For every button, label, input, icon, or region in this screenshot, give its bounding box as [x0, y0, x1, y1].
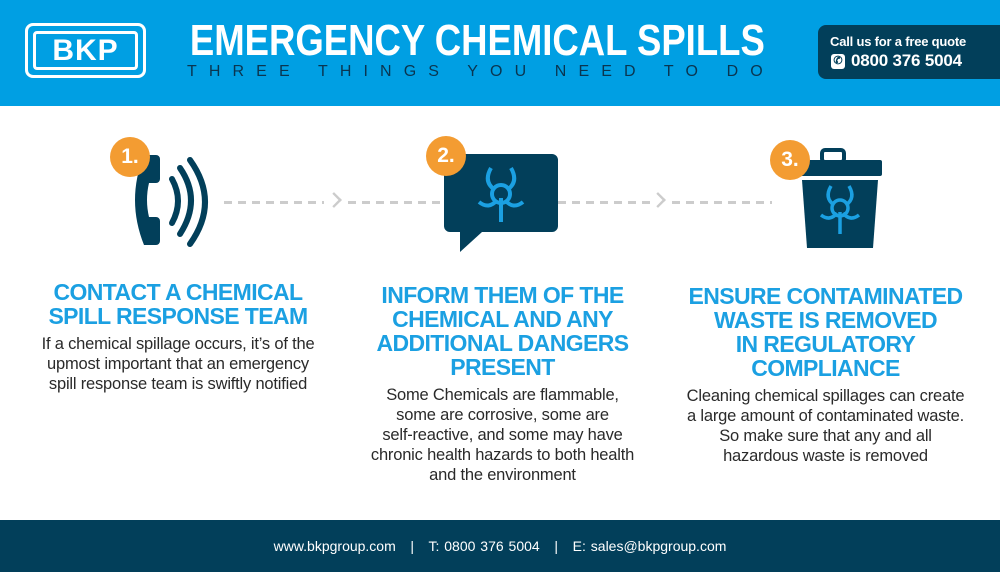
logo: BKP: [52, 34, 119, 67]
text 1: spill response team is swiftly notified: [49, 375, 307, 393]
text 1: upmost important that an emergency: [47, 355, 309, 373]
heading 1: [48, 279, 308, 329]
text 3: [687, 387, 964, 465]
text 2: [371, 386, 634, 484]
text 3: a large amount of contaminated waste.: [687, 407, 964, 425]
subtitle: THREE THINGS YOU NEED TO DO: [187, 63, 775, 80]
footer: www.bkpgroup.com | T: 0800 376 5004 | E: sales@bkpgroup.com: [274, 538, 726, 554]
column 1: [42, 279, 314, 393]
icon: speech bubble with biohazard: [444, 154, 558, 252]
logo: [25, 23, 146, 78]
call box: [818, 25, 1000, 79]
icon: bin: [802, 148, 882, 248]
badge 1: 1.: [121, 145, 139, 168]
icon: phone: ✆: [833, 55, 843, 67]
text 2: Some Chemicals are flammable,: [386, 386, 619, 404]
text 2: chronic health hazards to both health: [371, 446, 634, 464]
heading 2: INFORM THEM OF THE: [381, 282, 624, 308]
icon: phone step 1: [135, 155, 208, 247]
badge 1: [110, 137, 150, 177]
badge 3: [770, 140, 810, 180]
heading 2: CHEMICAL AND ANY: [392, 306, 613, 332]
heading 3: [689, 283, 962, 381]
text 3: hazardous waste is removed: [723, 447, 928, 465]
heading 3: COMPLIANCE: [751, 355, 900, 381]
heading 3: WASTE IS REMOVED: [714, 307, 937, 333]
text 1: If a chemical spillage occurs, it’s of the: [42, 335, 314, 353]
heading 3: ENSURE CONTAMINATED: [689, 283, 962, 309]
heading 2: [376, 282, 628, 380]
footer: [0, 520, 1000, 572]
text 2: and the environment: [429, 466, 576, 484]
text 2: self-reactive, and some may have: [382, 426, 623, 444]
title: EMERGENCY CHEMICAL SPILLS: [190, 16, 765, 65]
text 3: So make sure that any and all: [719, 427, 932, 445]
connectors: [224, 201, 324, 204]
heading 2: PRESENT: [450, 354, 555, 380]
call box: Call us for a free quote: [830, 34, 966, 49]
heading 1: CONTACT A CHEMICAL: [54, 279, 302, 305]
header bar: [0, 0, 1000, 106]
column 3: [687, 283, 964, 465]
heading 3: IN REGULATORY: [736, 331, 915, 357]
badge 2: [426, 136, 466, 176]
text 1: [42, 335, 314, 393]
heading 2: ADDITIONAL DANGERS: [376, 330, 628, 356]
badge 3: 3.: [781, 148, 799, 171]
text 3: Cleaning chemical spillages can create: [687, 387, 964, 405]
call box: 0800 376 5004: [851, 51, 962, 70]
text 2: some are corrosive, some are: [396, 406, 609, 424]
badge 2: 2.: [437, 144, 455, 167]
heading 1: SPILL RESPONSE TEAM: [48, 303, 308, 329]
column 2: [371, 282, 634, 484]
icon: phone: [831, 54, 845, 69]
